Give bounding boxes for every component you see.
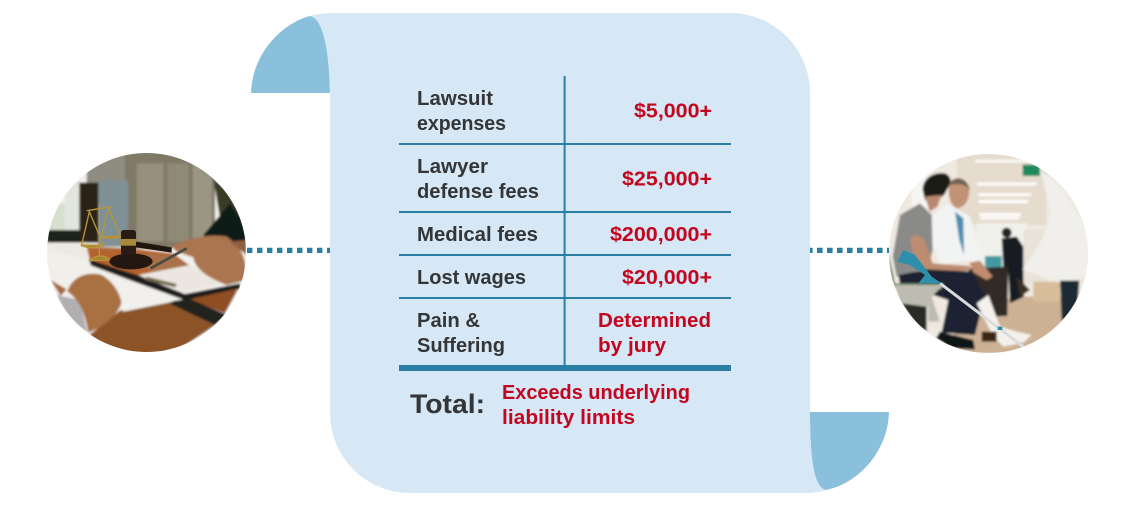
row: medical fees: $200,000+ xyxy=(610,224,712,246)
row: pain and suffering xyxy=(417,310,711,357)
scroll curl: bottom right xyxy=(810,412,889,490)
row: pain and suffering: Suffering xyxy=(417,335,505,357)
photo: lawyer desk with gavel xyxy=(43,150,250,357)
row: lawsuit expenses: expenses xyxy=(417,113,506,135)
panel: scroll xyxy=(251,13,889,493)
row: lawyer defense fees: Lawyer xyxy=(417,156,488,178)
scroll curl: top left xyxy=(251,16,330,93)
row: medical fees xyxy=(417,224,712,246)
total row: Exceeds underlying xyxy=(502,382,690,404)
row: lost wages: Lost wages xyxy=(417,267,526,289)
total row: liability limits xyxy=(502,407,635,429)
row: medical fees: Medical fees xyxy=(417,224,538,246)
row: pain and suffering: by jury xyxy=(598,335,667,357)
icon: crutch xyxy=(897,250,1023,347)
connector: left dotted line xyxy=(247,248,330,253)
row: lawyer defense fees: defense fees xyxy=(417,181,539,203)
row: pain and suffering: Pain & xyxy=(417,310,480,332)
row: pain and suffering: Determined xyxy=(598,310,711,332)
table grid lines xyxy=(399,76,731,371)
icon: brass scales xyxy=(81,203,121,261)
icon: gavel xyxy=(109,230,172,269)
row: lawsuit expenses: Lawsuit xyxy=(417,88,493,110)
scroll body xyxy=(310,13,826,493)
row: lawyer defense fees xyxy=(417,156,712,203)
row: lost wages: $20,000+ xyxy=(622,267,712,289)
row: lawsuit expenses: $5,000+ xyxy=(634,100,712,122)
photo: doctor and patient in hospital corridor xyxy=(887,150,1093,357)
icon: pen xyxy=(151,248,187,268)
table xyxy=(399,76,731,429)
connector: right dotted line xyxy=(807,248,889,253)
total row: Total: xyxy=(410,389,485,419)
row: lost wages xyxy=(417,267,712,289)
total row xyxy=(410,382,690,429)
row: lawsuit expenses xyxy=(417,88,712,135)
row: lawyer defense fees: $25,000+ xyxy=(622,168,712,190)
